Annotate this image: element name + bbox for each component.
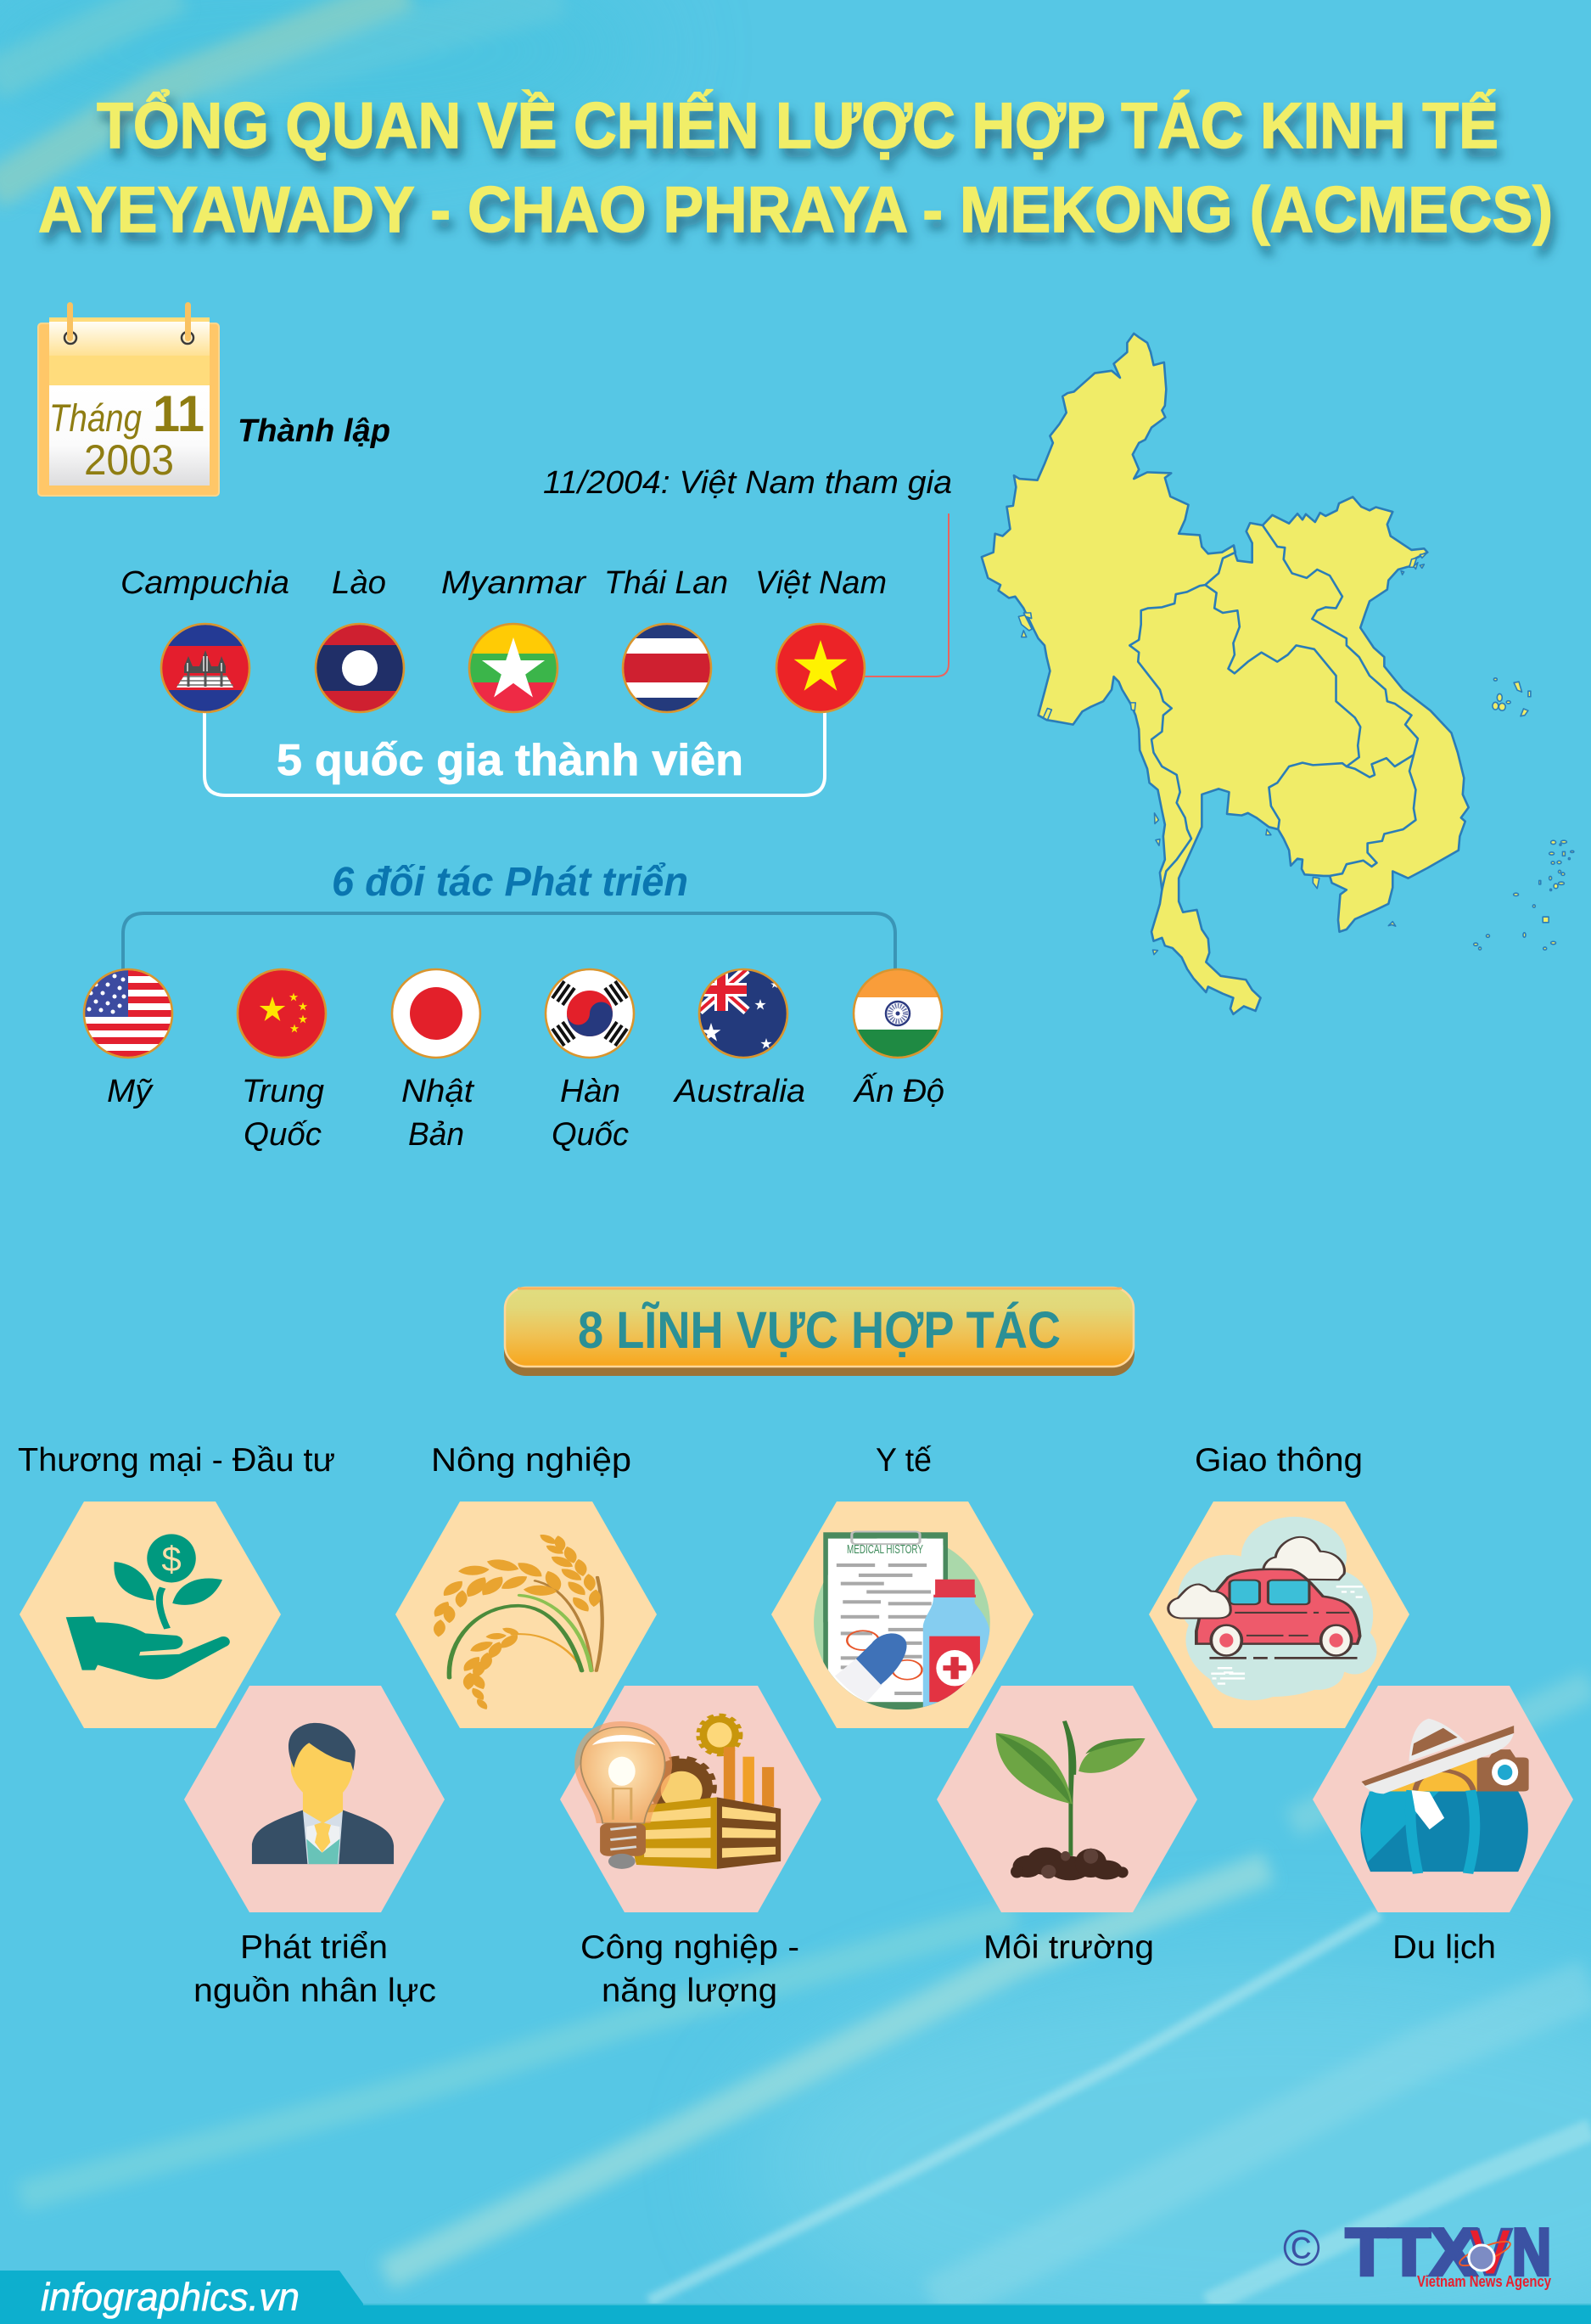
red connector line from Vietnam flag	[865, 514, 949, 676]
name: Cambodia: Campuchia	[120, 565, 289, 601]
established label: Thành lập	[238, 413, 390, 449]
name: Myanmar: Myanmar	[441, 565, 586, 601]
label: human resources: nguồn nhân lực	[193, 1973, 436, 2009]
hexagon: agriculture	[395, 1502, 657, 1728]
logo letters TTX: TTX	[1346, 2215, 1476, 2289]
name: Australia: Australia	[673, 1074, 805, 1109]
name: South Korea: Quốc	[552, 1117, 629, 1153]
title line 1: TỔNG QUAN VỀ CHIẾN LƯỢC HỢP TÁC KINH TẾ	[97, 90, 1499, 162]
label: transport: Giao thông	[1195, 1442, 1363, 1479]
name: Japan: Nhật	[401, 1074, 475, 1109]
agency name: Vietnam News Agency	[1417, 2273, 1551, 2290]
heading: five member states: 5 quốc gia thành viên	[277, 736, 743, 785]
flag: USA	[84, 969, 172, 1058]
globe and orbit	[1457, 2237, 1513, 2271]
label: human resources	[193, 1929, 436, 2009]
button: 8 fields of cooperation	[504, 1288, 1134, 1376]
white bracket for member states	[204, 712, 825, 795]
flag: Cambodia	[161, 624, 249, 712]
hexagon: health	[771, 1502, 1034, 1728]
logo letter N: N	[1512, 2215, 1551, 2289]
icon: car and clouds	[1168, 1517, 1377, 1700]
icon: hand holding money plant	[66, 1534, 230, 1680]
label: industry and energy	[580, 1929, 799, 2009]
label: environment: Môi trường	[983, 1929, 1154, 1966]
calendar text: year: 2003	[84, 436, 174, 484]
flag: India	[854, 969, 942, 1058]
hexagon: environment	[937, 1686, 1197, 1912]
flag: South Korea	[546, 969, 634, 1058]
icon: seedling	[996, 1721, 1146, 1880]
name: China: Trung	[242, 1074, 324, 1109]
icon text: medical history: MEDICAL HISTORY	[847, 1542, 923, 1557]
icon: factory and light bulb	[574, 1716, 781, 1869]
name: Japan	[401, 1074, 475, 1153]
flag: China	[238, 969, 326, 1058]
hexagon: industry and energy	[560, 1686, 821, 1912]
member country names	[120, 565, 887, 601]
flag: Vietnam	[776, 624, 865, 712]
label: human resources: Phát triển	[240, 1929, 388, 1966]
label: trade and investment: Thương mại - Đầu tư	[18, 1442, 335, 1479]
footer bar with website tab	[0, 2271, 1591, 2324]
heading: six development partners: 6 đối tác Phát triển	[332, 860, 688, 905]
copyright symbol: ©	[1283, 2220, 1320, 2276]
hexagon: transport	[1149, 1502, 1409, 1728]
top row labels	[18, 1442, 1363, 1479]
name: Thailand: Thái Lan	[604, 565, 728, 601]
name: South Korea	[552, 1074, 629, 1153]
icon: rice plant	[430, 1532, 602, 1710]
website text: infographics.vn	[41, 2275, 300, 2319]
map of the five member countries	[982, 334, 1574, 1014]
flag: Thailand	[623, 624, 711, 712]
title	[38, 90, 1553, 246]
button label: 8 LĨNH VỰC HỢP TÁC	[578, 1301, 1061, 1359]
icon: luggage, hat and camera	[1360, 1719, 1529, 1873]
name: Vietnam: Việt Nam	[755, 565, 887, 601]
map: internal borders	[1129, 525, 1418, 890]
hexagon: human resources	[184, 1686, 445, 1912]
label: industry and energy: năng lượng	[602, 1973, 777, 2009]
hexagon: tourism	[1313, 1686, 1573, 1912]
map: islands	[1018, 553, 1574, 955]
calendar text: 11: 11	[153, 385, 204, 442]
calendar text: month: Tháng	[49, 396, 142, 440]
hexagon: trade and investment	[20, 1502, 281, 1728]
name: USA: Mỹ	[107, 1074, 154, 1109]
flag: Laos	[316, 624, 404, 712]
partner country names	[107, 1072, 944, 1153]
name: Laos: Lào	[332, 565, 386, 601]
icon: dollar sign: $	[161, 1539, 182, 1579]
name: South Korea: Hàn	[560, 1074, 620, 1109]
flag: Myanmar	[469, 624, 557, 713]
partners bracket	[123, 913, 895, 969]
TTXVN logo	[1346, 2215, 1551, 2290]
Vietnam joined note: 11/2004: Việt Nam tham gia	[543, 465, 952, 501]
label: health: Y tế	[876, 1442, 932, 1479]
calendar icon: November 2003	[38, 302, 219, 496]
name: China: Quốc	[244, 1117, 322, 1153]
name: China	[242, 1074, 324, 1153]
label: industry and energy: Công nghiệp -	[580, 1929, 799, 1966]
name: India: Ấn Độ	[853, 1072, 944, 1109]
icon: medical record and medicine	[814, 1531, 990, 1709]
flag: Australia	[699, 969, 787, 1058]
name: Japan: Bản	[408, 1117, 464, 1153]
logo letter V: V	[1468, 2215, 1512, 2289]
icon: businessman	[252, 1723, 394, 1864]
flag: Japan	[392, 969, 480, 1058]
label: agriculture: Nông nghiệp	[431, 1442, 631, 1479]
label: tourism: Du lịch	[1392, 1929, 1496, 1966]
map: mainland outline	[982, 334, 1469, 1014]
bottom row labels	[193, 1929, 1496, 2009]
